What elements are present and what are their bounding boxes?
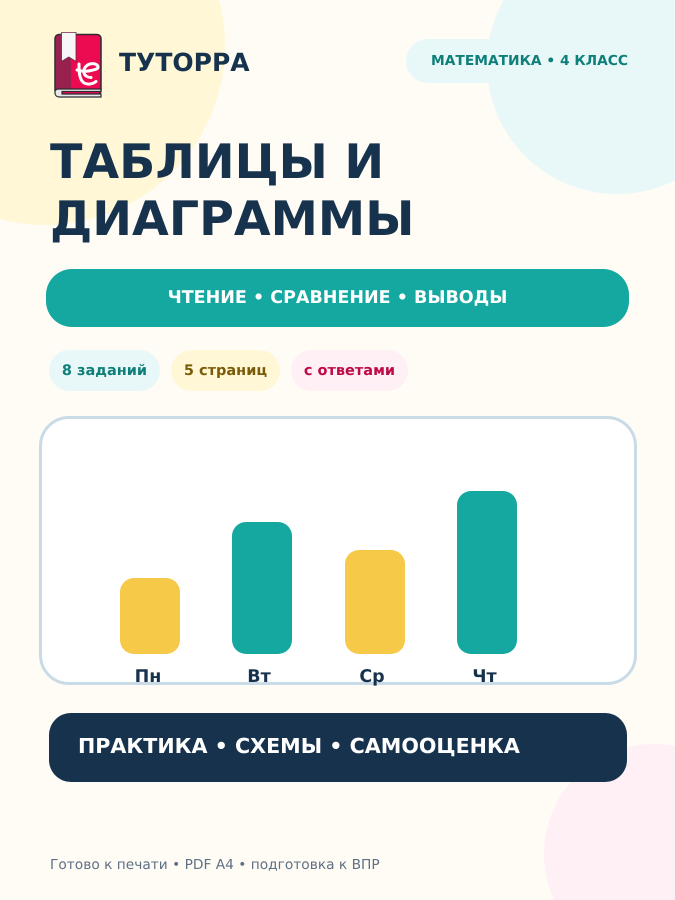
label: Wed: Ср [359,667,385,687]
tag: answers [291,350,408,391]
background circle: teal [487,0,675,195]
subject pill: МАТЕМАТИКА • 4 КЛАСС [431,53,628,69]
title: ДИАГРАММЫ [50,192,414,246]
title [50,135,414,246]
tag: tasks [49,350,160,391]
bar: Tue [232,522,292,654]
bar: Wed [345,550,405,654]
background circle: pink [544,744,675,900]
bar chart panel [39,416,637,685]
tag: pages [171,350,280,391]
icon: letter mark [77,64,98,84]
dark banner: ПРАКТИКА • СХЕМЫ • САМООЦЕНКА [78,734,520,758]
background circle: yellow [0,0,226,226]
title: ТАБЛИЦЫ И [50,135,384,190]
label: Thu: Чт [472,667,497,687]
tag: tasks: 8 заданий [62,363,147,379]
dark banner [49,713,627,782]
icon: book logo [54,32,102,98]
label: Tue: Вт [247,667,271,687]
subject pill [406,39,646,83]
brand name: ТУТОРРА [119,48,250,77]
bar: Thu [457,491,517,654]
tag: answers: с ответами [304,363,395,379]
teal banner: ЧТЕНИЕ • СРАВНЕНИЕ • ВЫВОДЫ [168,288,507,308]
bar: Mon [120,578,180,654]
footer note: Готово к печати • PDF A4 • подготовка к ВПР [50,857,380,873]
teal banner [46,269,629,327]
tag: pages: 5 страниц [184,363,267,379]
label: Mon: Пн [135,667,161,687]
